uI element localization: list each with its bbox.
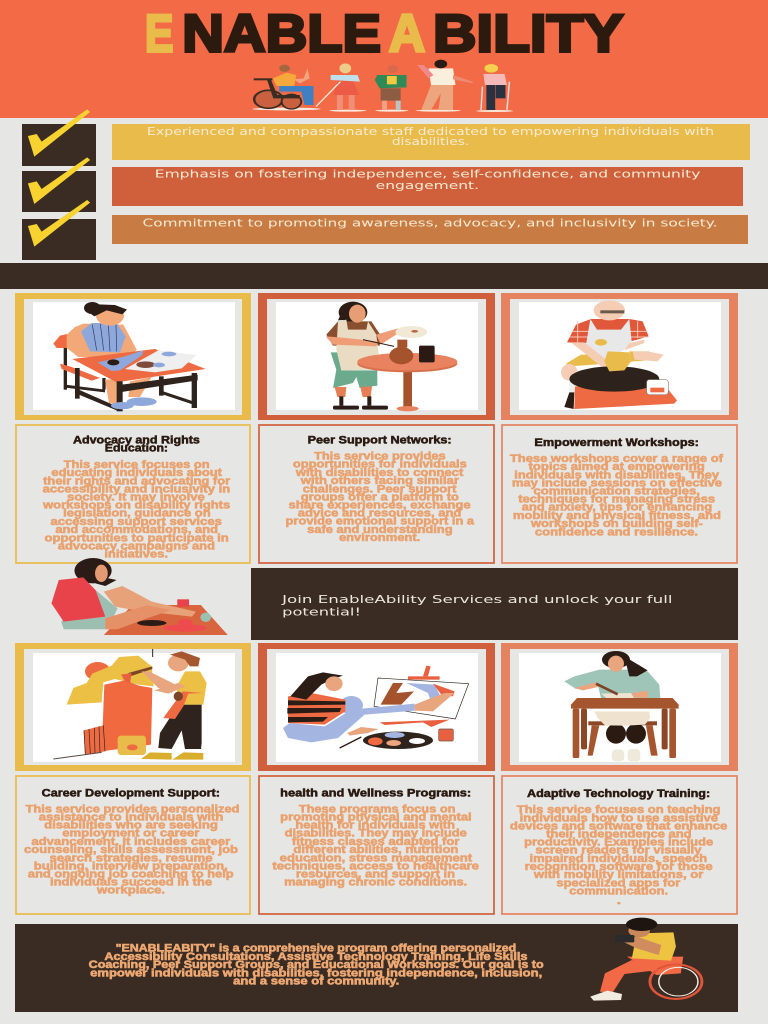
body text: with others facing similar (300, 474, 460, 486)
body text: initiatives. (104, 547, 168, 560)
body text: advice and resources, and (298, 506, 461, 519)
illustration: seated woman painting on rug (51, 558, 228, 635)
illustration: man at pottery wheel (561, 300, 677, 409)
body text: individuals with disabilities. They (514, 468, 719, 481)
body text: advocacy campaigns and (58, 539, 215, 552)
body text: with disabilities to connect (295, 466, 464, 478)
body text: workshops on building self- (530, 517, 703, 529)
body text: individuals how to use assistive (520, 811, 718, 824)
header banner (0, 0, 768, 118)
dark divider band (0, 263, 768, 289)
illustration: photographer in wheelchair (590, 918, 702, 1001)
illustration: woman working at desk (564, 651, 679, 762)
body text: topics aimed at empowering (528, 460, 705, 472)
card: health and Wellness Programs (259, 776, 494, 914)
body text: individuals succeed in the (50, 875, 212, 888)
heading: health and Wellness Programs: (280, 786, 471, 799)
body text: their rights and advocating for (43, 474, 231, 487)
heading (73, 433, 200, 454)
icon: check marks (28, 109, 90, 247)
panel: image frame woman at desk (501, 643, 738, 771)
panel: call to action banner (251, 568, 738, 640)
illustration: woman crafting at table (53, 302, 206, 411)
summary text (89, 941, 544, 987)
body text (286, 449, 474, 543)
summary text: Coaching, Peer Support Groups, and Educational Workshops. Our goal is to (89, 958, 544, 970)
body text: legislation, guidance on (63, 506, 211, 519)
body text: society. It may involve (67, 490, 205, 503)
body text: counseling, skills assessment, job (24, 843, 238, 855)
body text: different abilities, nutrition (293, 843, 458, 855)
body text: recognition software for those (525, 860, 713, 872)
body text: and anxiety, tips for enhancing (522, 500, 712, 513)
body text: accessibility and inclusivity in (43, 482, 230, 495)
heading: Career Development Support: (42, 786, 220, 799)
bar: independence (112, 167, 743, 206)
body text: impaired individuals, speech (529, 852, 707, 864)
banner text (281, 593, 672, 619)
summary text: and a sense of community. (233, 974, 399, 987)
body text: provide emotional support in a (286, 514, 474, 527)
body text: This service focuses on teaching (517, 803, 720, 815)
panel: image frame wall painter (15, 643, 251, 771)
panel: closing summary (15, 918, 738, 1012)
title: BILITY (433, 4, 624, 64)
body text: fitness classes adapted for (292, 835, 460, 847)
body text: resources, and support in (296, 867, 455, 880)
body text: education, stress management (280, 851, 473, 864)
card: Advocacy and Rights Education (16, 425, 250, 563)
body text (272, 802, 479, 888)
body text: techniques, access to healthcare (272, 859, 479, 872)
body text: techniques for managing stress (518, 492, 715, 505)
illustration: group of people with disabilities (252, 60, 513, 112)
body text: disabilities. They may include (285, 826, 467, 839)
heading: Advocacy and Rights (73, 433, 200, 446)
body text: disabilities who are seeking (44, 818, 218, 831)
body text: safe and understanding (307, 523, 453, 535)
body text (42, 458, 231, 560)
body text: This service focuses on (64, 458, 210, 470)
body text: environment. (339, 531, 420, 543)
body text: This service provides (314, 449, 446, 462)
card: Career Development Support (16, 776, 250, 914)
body text: mobility and physical fitness, and (513, 509, 721, 521)
body text: challenges. Peer support (303, 482, 457, 495)
bar: staff (112, 124, 750, 160)
summary text: empower individuals with disabilities, fostering independence, inclusion, (90, 966, 542, 979)
body text (510, 803, 728, 906)
body text: educating individuals about (51, 466, 222, 478)
body text: . (617, 894, 621, 906)
body text: accessing support services (50, 515, 222, 527)
bar text: disabilities. (392, 135, 469, 148)
body text: and ongoing job coaching to help (28, 867, 234, 880)
body text: health for individuals with (295, 818, 455, 831)
banner text: potential! (282, 606, 361, 619)
body text: screen readers for visually (535, 843, 702, 856)
body text: opportunities to participate in (45, 531, 229, 544)
body text: search strategies, resume (49, 851, 213, 864)
bar text: Emphasis on fostering independence, self-confidence, and community (155, 168, 700, 181)
body text: their independence and (546, 827, 692, 840)
illustration: woman painting on easel (283, 666, 469, 749)
title (145, 4, 624, 64)
body text: These workshops cover a range of (510, 452, 723, 464)
title: E (145, 4, 173, 64)
body text: This service provides personalized (25, 802, 240, 815)
bar text (143, 125, 718, 229)
bar text: Commitment to promoting awareness, advocacy, and inclusivity in society. (143, 217, 718, 229)
summary text: Accessibility Consultations, Assistive Technology Training, Life Skills (104, 950, 528, 962)
body text (24, 802, 240, 896)
body text (510, 452, 723, 538)
body text: employment or career (62, 826, 200, 839)
body text: building, interview preparation, (34, 859, 228, 872)
body text: workshops on disability rights (42, 498, 230, 511)
body text: opportunities for individuals (293, 457, 467, 470)
title: A (389, 4, 425, 64)
panel: image frame canvas artist (258, 643, 495, 771)
body text: communication. (569, 884, 668, 897)
panel: image frame pottery painter (258, 293, 495, 420)
banner text: Join EnableAbility Services and unlock your full (281, 593, 672, 606)
body text: may include sessions on effective (512, 476, 722, 489)
card: Empowerment Workshops (502, 425, 737, 563)
title: NABLE (182, 4, 381, 64)
body text: productivity. Examples include (524, 835, 713, 848)
bar: commitment (112, 215, 748, 244)
summary text: "ENABLEABITY" is a comprehensive program offering personalized (116, 941, 516, 954)
body text: specialized apps for (556, 876, 681, 889)
body text: share experiences, exchange (288, 498, 471, 511)
body text: These programs focus on (299, 802, 456, 815)
heading: Adaptive Technology Training: (527, 787, 710, 799)
heading: Education: (105, 441, 168, 454)
body text: assistance to individuals with (39, 810, 223, 823)
heading: Empowerment Workshops: (534, 436, 699, 448)
panel: image frame crafting woman (15, 293, 251, 420)
body text: and accommodations, and (55, 523, 218, 535)
panel: key points checklist (22, 109, 750, 260)
body text: workplace. (96, 883, 165, 896)
heading: Peer Support Networks: (308, 433, 452, 446)
body text: promoting physical and mental (280, 810, 472, 823)
illustration: man painting a wall (53, 649, 207, 760)
panel: image frame potter (501, 293, 738, 420)
bar text: engagement. (376, 179, 479, 192)
illustration: woman painting a vase (326, 302, 457, 411)
body text: confidence and resilience. (535, 525, 698, 538)
card: Adaptive Technology Training (502, 776, 737, 914)
body text: communication strategies, (533, 484, 700, 497)
body text: with mobility limitations, or (533, 868, 704, 880)
body text: managing chronic conditions. (284, 875, 467, 888)
card: Peer Support Networks (259, 425, 494, 563)
body text: groups offer a platform to (301, 490, 459, 503)
body text: advancement. It includes career (31, 835, 231, 847)
